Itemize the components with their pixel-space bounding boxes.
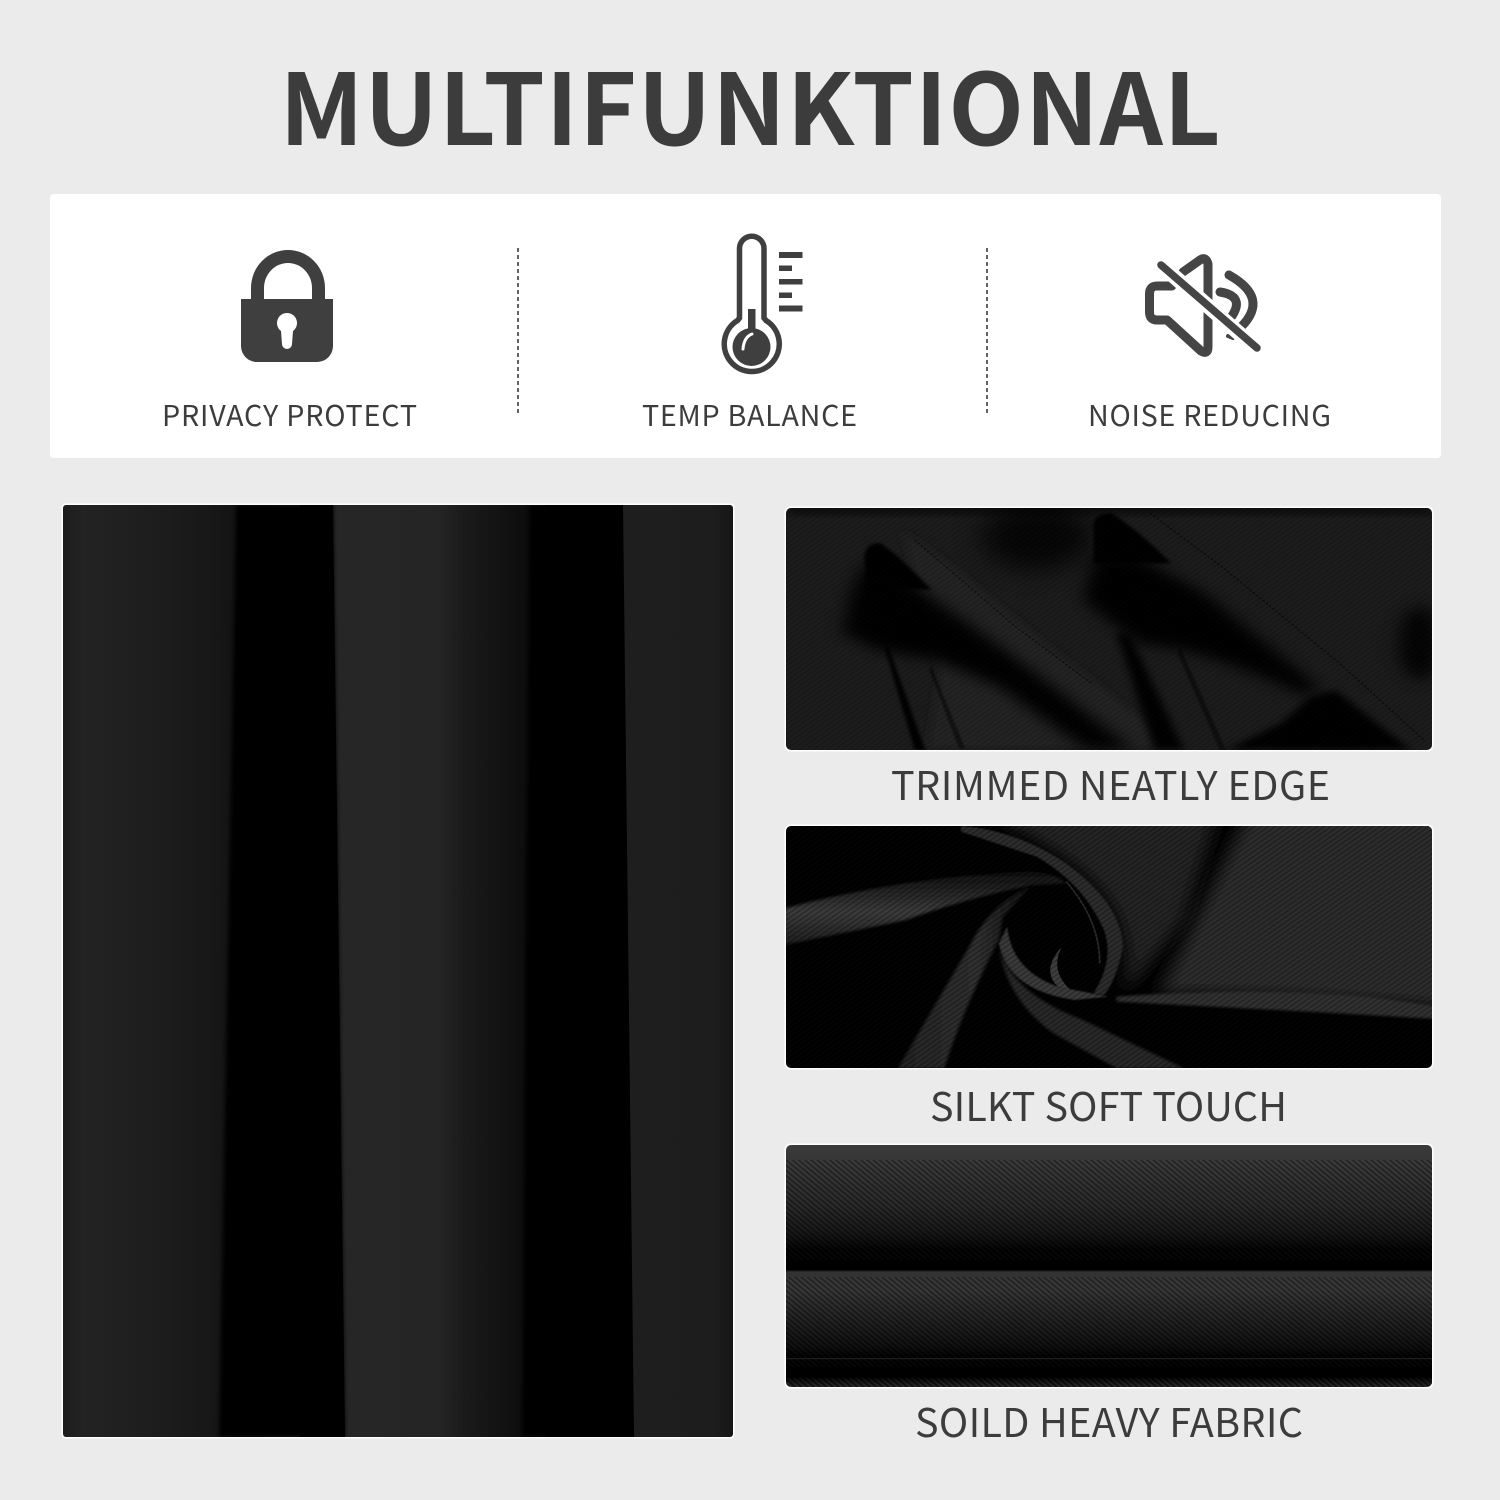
caption: silkt soft touch: SILKT SOFT TOUCH xyxy=(930,1076,1287,1133)
photo: heavy fabric detail xyxy=(784,1144,1434,1388)
icon: padlock xyxy=(241,250,333,362)
label: temp balance: TEMP BALANCE xyxy=(642,394,857,435)
caption: trimmed neatly edge: TRIMMED NEATLY EDGE xyxy=(891,755,1330,812)
photo: trimmed edge detail xyxy=(784,503,1441,752)
photo: black curtain panel xyxy=(62,504,734,1438)
icon: muted speaker xyxy=(1150,259,1257,352)
label: privacy protect: PRIVACY PROTECT xyxy=(162,394,417,435)
label: noise reducing: NOISE REDUCING xyxy=(1088,394,1331,435)
icon: thermometer xyxy=(724,236,802,372)
caption: soild heavy fabric: SOILD HEAVY FABRIC xyxy=(915,1392,1303,1449)
panel: feature bar xyxy=(50,194,1441,458)
photo: silky swirl detail xyxy=(784,824,1434,1070)
title: MULTIFUNKTIONAL xyxy=(280,32,1220,174)
